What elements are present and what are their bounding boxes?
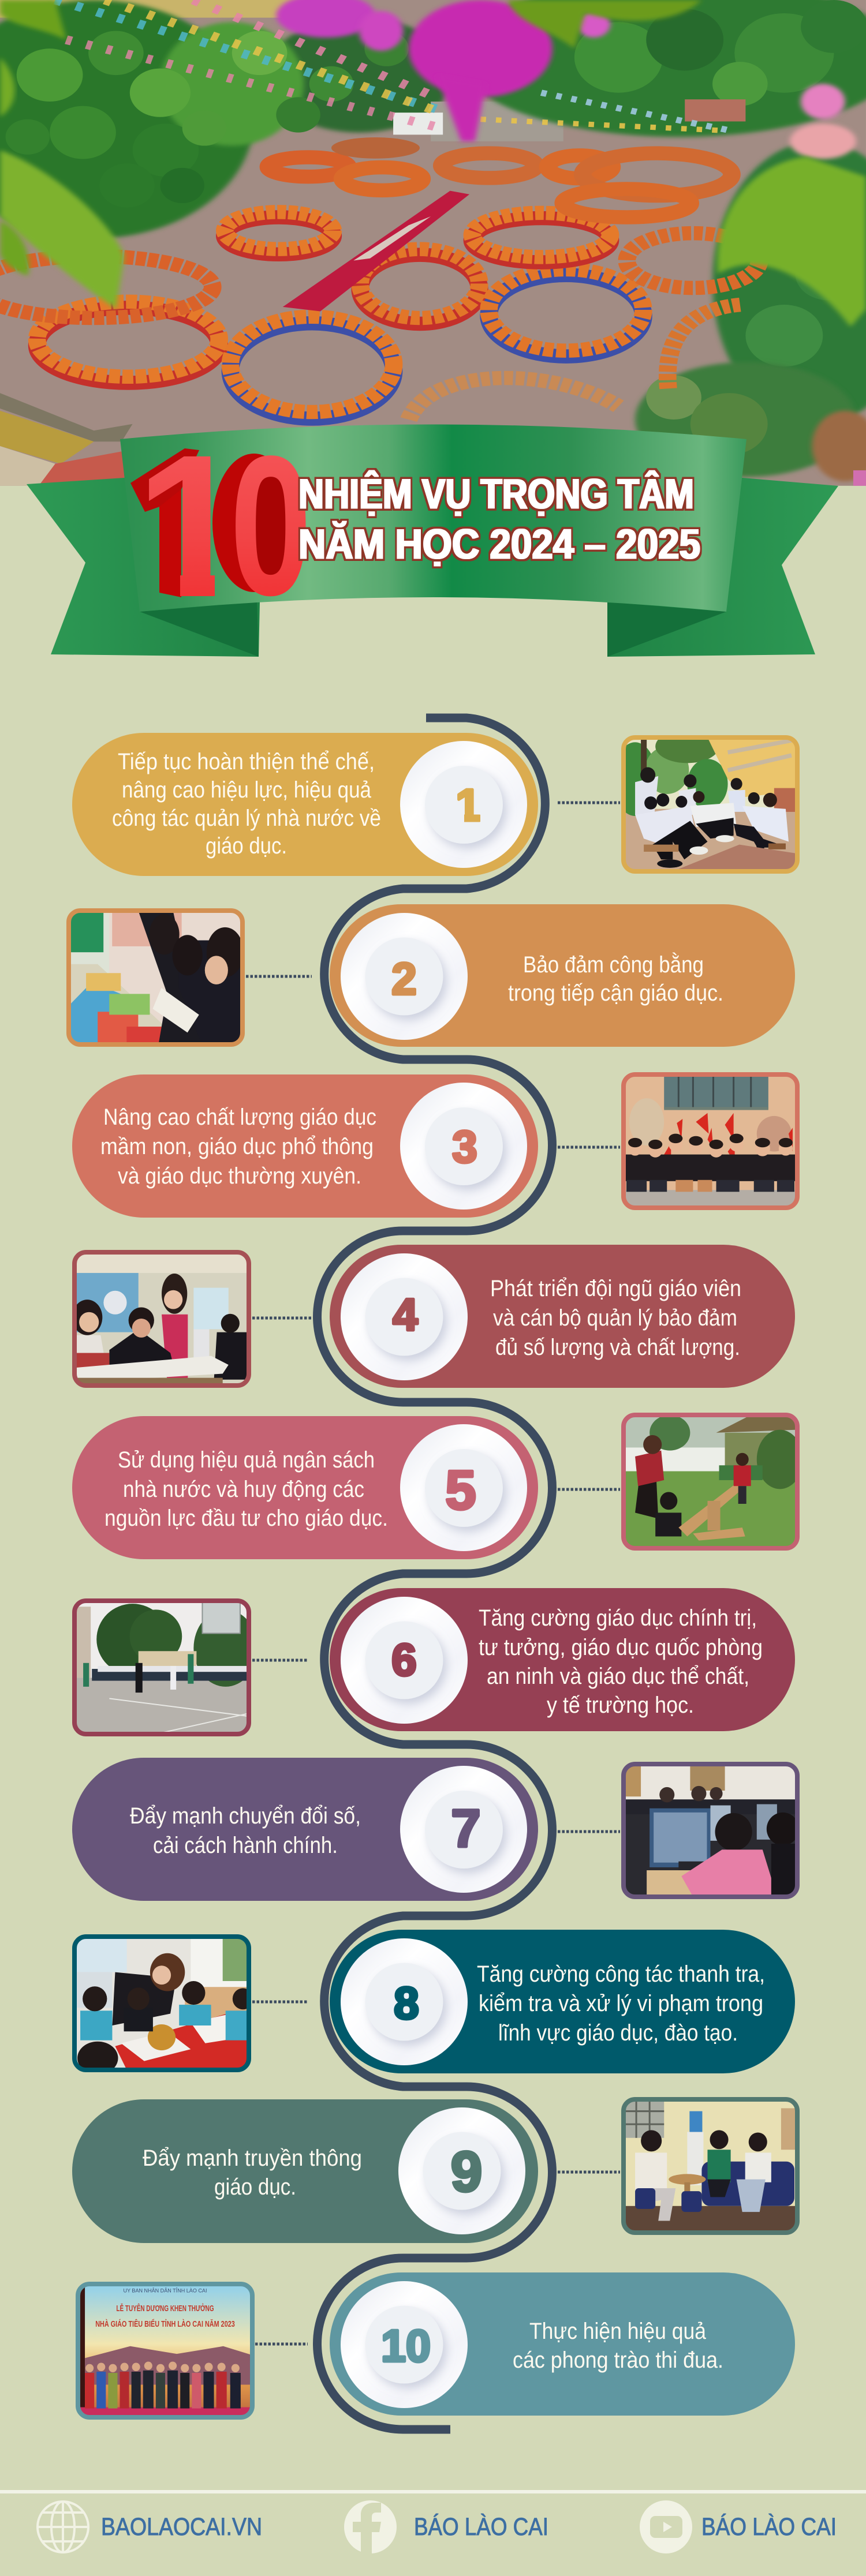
pill <box>72 2099 538 2243</box>
task text: trong tiếp cận giáo dục. <box>508 980 723 1006</box>
winding timeline track <box>317 718 552 2429</box>
task text <box>130 1803 361 1858</box>
task text <box>479 1605 763 1718</box>
photo: award ceremony: UY BAN NHÂN DÂN TỈNH LÀO CAI <box>123 2287 207 2293</box>
connector <box>255 2343 308 2345</box>
task text <box>104 1447 388 1531</box>
foreground flowers and leaves <box>0 0 866 486</box>
panel: task 4 <box>72 1245 795 1388</box>
pill <box>330 1588 795 1731</box>
footer divider <box>0 2490 866 2493</box>
icon: globe <box>38 2502 88 2552</box>
pill <box>72 1758 538 1901</box>
panel: task 9 <box>72 2099 797 2243</box>
pill <box>72 1416 538 1559</box>
photo: teacher in classroom <box>72 1252 249 1386</box>
title line 2: NĂM HỌC 2024 – 2025 <box>298 521 700 568</box>
task text: kiểm tra và xử lý vi phạm trong <box>479 1991 763 2016</box>
task text: nguồn lực đầu tư cho giáo dục. <box>104 1506 388 1531</box>
task text: Đẩy mạnh chuyển đổi số, <box>130 1803 361 1829</box>
number badge 4: 4 <box>393 1289 418 1340</box>
number badge 6 <box>341 1597 468 1724</box>
task text: Thực hiện hiệu quả <box>529 2319 707 2344</box>
task text: Tăng cường công tác thanh tra, <box>477 1961 765 1987</box>
number badge 10: 10 <box>381 2320 431 2371</box>
task text <box>143 2146 362 2200</box>
number badge 9 <box>398 2107 525 2234</box>
number badge 7: 7 <box>451 1799 481 1858</box>
photo: basketball court <box>74 1601 257 1734</box>
number badge 7 <box>400 1766 527 1893</box>
big number 10: 1 <box>135 412 248 639</box>
pill <box>330 1930 795 2073</box>
task text: giáo dục. <box>206 833 287 859</box>
number badge 3: 3 <box>452 1121 477 1172</box>
panel: task 6 <box>74 1588 795 1734</box>
panel: task 1 <box>72 730 797 876</box>
number badge 2 <box>341 913 468 1040</box>
pill <box>330 904 795 1047</box>
photo: award ceremony: LỄ TUYÊN DƯƠNG KHEN THƯỞNG <box>116 2303 214 2313</box>
footer: facebook <box>344 2500 548 2553</box>
connector <box>558 2171 620 2173</box>
connector <box>252 1317 312 1319</box>
task text: tư tưởng, giáo dục quốc phòng <box>479 1635 763 1660</box>
task text: an ninh và giáo dục thể chất, <box>487 1664 749 1689</box>
photo: students reading in the yard <box>613 730 797 871</box>
icon: youtube <box>640 2500 692 2553</box>
number badge 3 <box>400 1083 527 1210</box>
task text: Sử dụng hiệu quả ngân sách <box>118 1447 375 1473</box>
pill <box>72 1074 538 1218</box>
photo: children with flags <box>624 1074 797 1208</box>
website label: BAOLAOCAI.VN <box>101 2513 262 2541</box>
photo: girls reading books <box>69 911 244 1044</box>
task text <box>477 1961 765 2046</box>
task text: lĩnh vực giáo dục, đào tạo. <box>498 2020 738 2046</box>
facebook label: BÁO LÀO CAI <box>414 2513 548 2541</box>
task text: Tiếp tục hoàn thiện thể chế, <box>118 749 375 774</box>
task text: nâng cao hiệu lực, hiệu quả <box>122 777 372 803</box>
ribbon tails <box>27 476 838 657</box>
number badge 5: 5 <box>445 1459 476 1521</box>
rings of pupils <box>0 137 759 420</box>
panel: task 10 <box>78 2272 795 2417</box>
photo: award ceremony <box>78 2284 252 2417</box>
task text: y tế trường học. <box>547 1693 694 1718</box>
number badge 2: 2 <box>391 953 417 1004</box>
connector <box>558 1146 620 1148</box>
task text: Bảo đảm công bằng <box>523 952 704 978</box>
pill <box>72 733 538 876</box>
number badge 8: 8 <box>394 1978 419 2028</box>
panel: task 5 <box>72 1415 803 1559</box>
youtube label: BÁO LÀO CAI <box>701 2513 837 2541</box>
task text: nhà nước và huy động các <box>123 1477 364 1502</box>
task text <box>508 952 723 1006</box>
number badge 10 <box>341 2281 468 2408</box>
task text: Đẩy mạnh truyền thông <box>143 2146 362 2171</box>
number badge 1: 1 <box>456 780 481 830</box>
panel: task 8 <box>74 1930 795 2075</box>
task text: công tác quản lý nhà nước về <box>112 806 381 831</box>
panel: task 3 <box>72 1074 797 1218</box>
big number 10: 0 <box>230 415 312 637</box>
number badge 9: 9 <box>451 2140 482 2203</box>
title ribbon <box>27 412 838 657</box>
photo: teacher and children at seesaw <box>624 1415 803 1548</box>
title line 1: NHIỆM VỤ TRỌNG TÂM <box>298 471 694 518</box>
pill <box>330 2272 795 2416</box>
footer: website <box>38 2502 262 2552</box>
task text <box>112 749 381 859</box>
task text: giáo dục. <box>214 2174 296 2200</box>
big number 10 <box>130 448 306 597</box>
number badge 1 <box>400 741 527 868</box>
task text <box>513 2319 723 2373</box>
connector <box>246 975 312 978</box>
photo: students at computers <box>624 1764 799 1897</box>
number badge 4 <box>341 1253 468 1380</box>
footer: youtube <box>640 2500 837 2553</box>
panel: task 2 <box>69 904 795 1047</box>
task text: cải cách hành chính. <box>153 1833 338 1858</box>
number badge 6: 6 <box>391 1634 417 1685</box>
task text <box>100 1104 376 1189</box>
connector <box>252 1658 308 1662</box>
task text: và giáo dục thường xuyên. <box>118 1163 361 1189</box>
task text: Phát triển đội ngũ giáo viên <box>490 1276 741 1301</box>
icon: facebook <box>344 2500 397 2553</box>
number badge 5 <box>400 1424 527 1551</box>
task text: Nâng cao chất lượng giáo dục <box>103 1104 376 1130</box>
connector <box>558 1830 620 1833</box>
task text: mầm non, giáo dục phổ thông <box>100 1134 374 1159</box>
task text: Tăng cường giáo dục chính trị, <box>479 1605 757 1631</box>
task text: đủ số lượng và chất lượng. <box>495 1335 740 1360</box>
connector <box>558 801 620 804</box>
connector <box>252 2000 308 2004</box>
bunting <box>55 0 729 130</box>
pill <box>330 1245 795 1388</box>
number badge 8 <box>341 1938 468 2065</box>
task text: các phong trào thi đua. <box>513 2347 723 2373</box>
ribbon band <box>120 425 746 612</box>
connector <box>558 1488 620 1491</box>
task text: và cán bộ quản lý bảo đảm <box>493 1305 737 1331</box>
task text <box>490 1276 741 1360</box>
photo: students in reading corner <box>624 2099 797 2233</box>
photo: teacher with kindergarten pupils <box>74 1937 253 2075</box>
panel: task 7 <box>72 1758 799 1901</box>
hero photo: schoolyard with circles of pupils <box>0 0 866 486</box>
